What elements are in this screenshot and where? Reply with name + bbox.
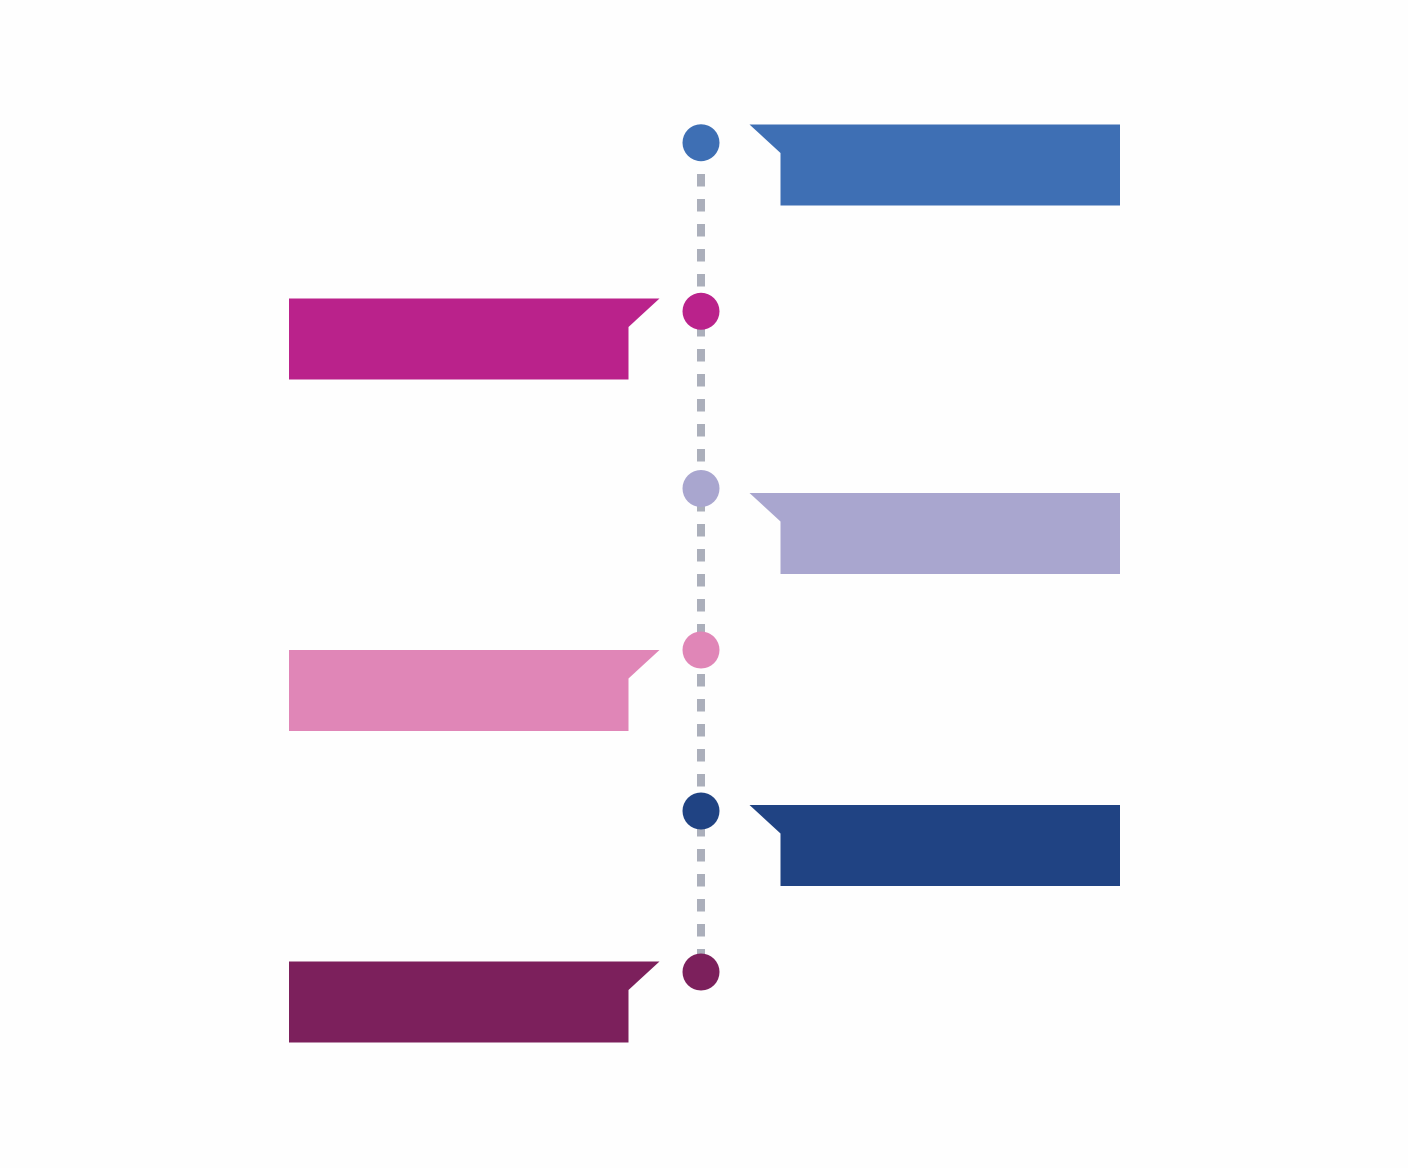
step 6: plum node and banner [289,954,720,1042]
step 2: magenta node and banner [289,293,720,380]
step 5: navy node and banner [682,792,1120,886]
step 1: blue node and banner [682,124,1120,206]
dashed timeline spine [697,174,705,962]
step 3: lavender node and banner [682,470,1120,574]
step 4: pink node and banner [289,632,720,731]
